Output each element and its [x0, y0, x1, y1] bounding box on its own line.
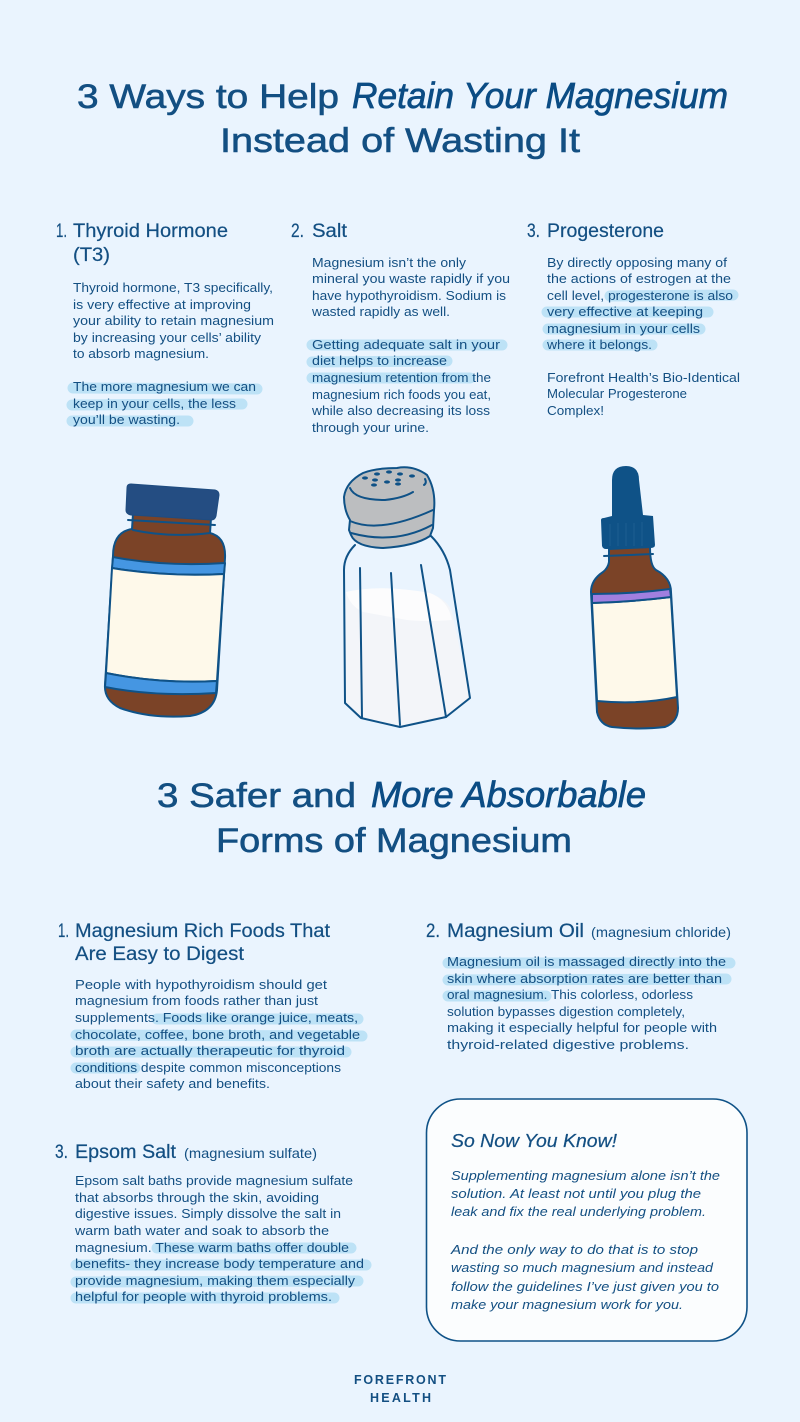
icon: salt shaker [344, 467, 470, 727]
text block: conclusion [450, 1168, 720, 1312]
text block: progesterone body: cell level, progesterone is also [547, 288, 733, 303]
heading: thyroid hormone: (T3) [73, 245, 110, 266]
text block: magnesium oil body: Magnesium oil is massaged directly into the [447, 954, 726, 969]
heading: magnesium rich foods: Are Easy to Digest [75, 944, 245, 965]
heading: salt: 2. [291, 221, 304, 242]
text block: conclusion: Supplementing magnesium alone isn’t the [451, 1168, 720, 1183]
heading: thyroid hormone: 1. [56, 221, 67, 242]
text block: magnesium rich foods body: supplements. Foods like orange juice, meats, [75, 1010, 358, 1025]
title: 3 ways to retain magnesium: Instead of Wasting It [220, 122, 581, 160]
heading: magnesium rich foods: 1. [58, 921, 69, 942]
title: safer and more absorbable forms: More Absorbable [371, 774, 646, 815]
title: 3 ways to retain magnesium [77, 75, 728, 160]
text block: progesterone body: Forefront Health’s Bio-Identical [547, 370, 740, 385]
text block: magnesium oil body: skin where absorption rates are better than [447, 971, 722, 986]
heading: magnesium oil: 2. [426, 921, 440, 942]
text block: salt body: Getting adequate salt in your [312, 337, 501, 352]
text block: thyroid hormone body: you’ll be wasting. [73, 412, 180, 427]
section: epsom salt [55, 1142, 366, 1304]
text block: thyroid hormone body: Thyroid hormone, T3 specifically, [73, 280, 273, 295]
section: salt [291, 221, 510, 435]
text block: progesterone body: By directly opposing many of [547, 255, 727, 270]
text block: progesterone body: magnesium in your cells [547, 321, 701, 336]
heading: salt: Salt [312, 221, 348, 242]
heading: thyroid hormone: Thyroid Hormone [73, 221, 228, 242]
heading: epsom salt: 3. [55, 1142, 68, 1163]
text block: thyroid hormone body: by increasing your cells’ ability [73, 330, 262, 345]
text block: conclusion: leak and fix the real underlying problem. [451, 1204, 706, 1219]
heading: epsom salt [55, 1142, 317, 1163]
text block: epsom salt body: that absorbs through the skin, avoiding [75, 1190, 319, 1205]
heading: epsom salt: (magnesium sulfate) [184, 1145, 317, 1161]
panel: so now you know [426, 1099, 747, 1341]
icon: dropper bottle [591, 466, 678, 728]
heading: salt [291, 221, 348, 242]
text block: salt body: wasted rapidly as well. [311, 304, 450, 319]
text block: magnesium oil body [447, 954, 726, 1052]
logo: forefront health [354, 1373, 446, 1405]
text block: magnesium oil body: oral magnesium. This colorless, odorless [447, 987, 694, 1002]
text block: magnesium rich foods body [75, 977, 360, 1091]
text block: salt body: while also decreasing its loss [311, 403, 491, 418]
text block: progesterone body [546, 255, 740, 418]
section: magnesium rich foods [58, 921, 362, 1091]
text block: thyroid hormone body: to absorb magnesium. [73, 346, 209, 361]
text block: progesterone body: Molecular Progesterone [547, 386, 687, 401]
text block: magnesium oil body: solution bypasses digestion completely, [447, 1004, 685, 1019]
title: safer and more absorbable forms [157, 774, 646, 860]
text block: epsom salt body: benefits- they increase body temperature and [75, 1256, 364, 1271]
section: thyroid hormone [56, 221, 274, 427]
title: 3 ways to retain magnesium: 3 Ways to Help [77, 78, 339, 116]
text block: thyroid hormone body: The more magnesium we can [73, 379, 256, 394]
title: 3 ways to retain magnesium: Retain Your Magnesium [352, 75, 728, 116]
heading: magnesium oil: Magnesium Oil [447, 921, 584, 942]
text block: salt body: Magnesium isn’t the only [312, 255, 467, 270]
heading: magnesium oil [426, 921, 731, 942]
text block: conclusion: And the only way to do that is to stop [450, 1242, 698, 1257]
text block: conclusion: solution. At least not until you plug the [451, 1186, 701, 1201]
text block: salt body [311, 255, 510, 435]
text block: conclusion: make your magnesium work for you. [451, 1297, 683, 1312]
heading: so now you know: So Now You Know! [451, 1131, 617, 1151]
text block: thyroid hormone body: keep in your cells, the less [73, 396, 237, 411]
text block: salt body: mineral you waste rapidly if you [312, 271, 510, 286]
title: safer and more absorbable forms: Forms of Magnesium [216, 822, 572, 860]
text block: magnesium rich foods body: conditions despite common misconceptions [75, 1060, 342, 1075]
heading: epsom salt: Epsom Salt [75, 1142, 177, 1163]
text block: magnesium rich foods body: magnesium from foods rather than just [75, 993, 318, 1008]
title: safer and more absorbable forms: 3 Safer and [157, 777, 356, 815]
logo: forefront health: HEALTH [370, 1391, 431, 1405]
text block: conclusion: follow the guidelines I’ve just given you to [451, 1279, 719, 1294]
text block: epsom salt body: warm bath water and soak to absorb the [74, 1223, 329, 1238]
text block: salt body: magnesium rich foods you eat, [312, 387, 491, 402]
text block: conclusion: wasting so much magnesium and instead [451, 1260, 714, 1275]
text block: magnesium oil body: thyroid-related digestive problems. [447, 1037, 689, 1052]
icon: supplement bottle [105, 484, 225, 717]
heading: magnesium rich foods [58, 921, 331, 965]
text block: epsom salt body: magnesium. These warm baths offer double [75, 1240, 349, 1255]
text block: progesterone body: where it belongs. [546, 337, 652, 352]
text block: epsom salt body [74, 1173, 364, 1304]
text block: thyroid hormone body [73, 280, 274, 427]
text block: progesterone body: the actions of estrogen at the [547, 271, 731, 286]
text block: salt body: through your urine. [312, 420, 429, 435]
logo: forefront health: FOREFRONT [354, 1373, 446, 1387]
text block: thyroid hormone body: is very effective at improving [73, 297, 251, 312]
text block: magnesium oil body: making it especially helpful for people with [447, 1020, 717, 1035]
heading: progesterone: 3. [527, 221, 540, 242]
text block: epsom salt body: Epsom salt baths provide magnesium sulfate [75, 1173, 353, 1188]
text block: magnesium rich foods body: broth are actually therapeutic for thyroid [75, 1043, 345, 1058]
text block: magnesium rich foods body: chocolate, coffee, bone broth, and vegetable [75, 1027, 360, 1042]
text block: salt body: diet helps to increase [312, 353, 447, 368]
text block: epsom salt body: helpful for people with thyroid problems. [75, 1289, 332, 1304]
heading: magnesium oil: (magnesium chloride) [591, 924, 731, 940]
text block: epsom salt body: digestive issues. Simply dissolve the salt in [75, 1206, 341, 1221]
text block: salt body: magnesium retention from the [312, 370, 491, 385]
heading: thyroid hormone [56, 221, 228, 266]
text block: progesterone body: very effective at keeping [547, 304, 703, 319]
text block: progesterone body: Complex! [547, 403, 604, 418]
section: progesterone [527, 221, 740, 418]
text block: thyroid hormone body: your ability to retain magnesium [73, 313, 274, 328]
section: magnesium oil [426, 921, 731, 1052]
text block: salt body: have hypothyroidism. Sodium is [312, 288, 507, 303]
text block: epsom salt body: provide magnesium, making them especially [75, 1273, 356, 1288]
salt shaker holes [362, 470, 415, 487]
heading: progesterone: Progesterone [547, 221, 664, 242]
heading: magnesium rich foods: Magnesium Rich Foods That [75, 921, 331, 942]
text block: magnesium rich foods body: People with hypothyroidism should get [75, 977, 327, 992]
text block: magnesium rich foods body: about their safety and benefits. [75, 1076, 270, 1091]
